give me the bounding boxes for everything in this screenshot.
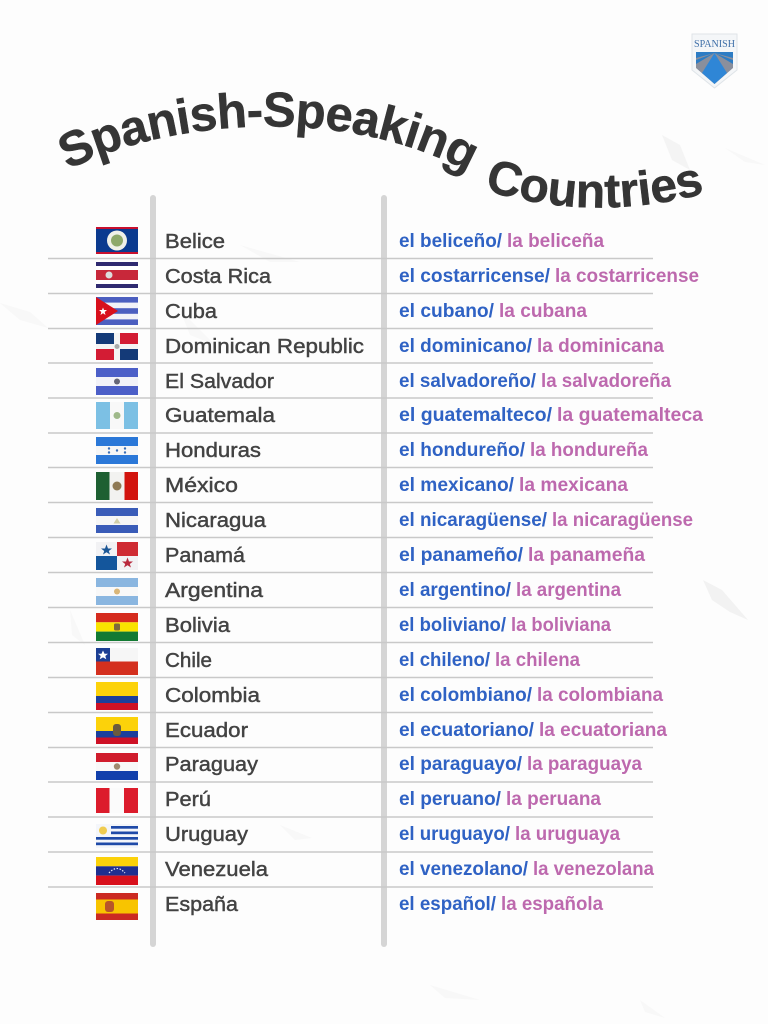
row: Chile — [96, 648, 580, 675]
feminine form: la hondureña — [530, 439, 648, 461]
feminine form: la uruguaya — [515, 823, 620, 845]
flag: Ecuador — [96, 717, 138, 744]
country name: Argentina — [165, 579, 264, 602]
row: Argentina — [96, 578, 621, 605]
masculine form: el cubano/ — [399, 300, 495, 322]
feminine form: la cubana — [499, 300, 587, 322]
flag: Panama — [96, 542, 138, 570]
country name: Perú — [165, 788, 211, 811]
feminine form: la chilena — [495, 649, 580, 671]
feminine form: la salvadoreña — [541, 370, 671, 392]
country name: Costa Rica — [165, 265, 272, 288]
country name: Belice — [165, 230, 225, 253]
flag: Honduras — [96, 437, 138, 464]
country name: Ecuador — [165, 719, 248, 742]
feminine form: la mexicana — [519, 474, 628, 496]
masculine form: el costarricense/ — [399, 265, 551, 287]
country name: Colombia — [165, 684, 261, 707]
flag: Cuba — [96, 297, 138, 325]
masculine form: el boliviano/ — [399, 614, 507, 636]
row: Cuba — [96, 297, 587, 325]
masculine form: el nicaragüense/ — [399, 509, 548, 531]
masculine form: el venezolano/ — [399, 858, 529, 880]
feminine form: la venezolana — [533, 858, 654, 880]
feminine form: la nicaragüense — [552, 509, 693, 531]
flag: Colombia — [96, 682, 138, 710]
masculine form: el guatemalteco/ — [399, 404, 553, 426]
row: Guatemala — [96, 402, 703, 429]
flag: Argentina — [96, 578, 138, 605]
flag: Dominican Republic — [96, 333, 138, 360]
country name: Bolivia — [165, 614, 231, 637]
masculine form: el colombiano/ — [399, 684, 533, 706]
masculine form: el ecuatoriano/ — [399, 719, 535, 741]
row: Nicaragua — [96, 508, 693, 533]
row: El Salvador — [96, 368, 671, 395]
row: Ecuador — [96, 717, 667, 744]
masculine form: el uruguayo/ — [399, 823, 511, 845]
feminine form: la ecuatoriana — [539, 719, 667, 741]
masculine form: el salvadoreño/ — [399, 370, 537, 392]
country name: México — [165, 474, 238, 497]
row: Colombia — [96, 682, 663, 710]
icon: academy logo shield — [692, 34, 737, 88]
row: Honduras — [96, 437, 648, 464]
icon: academy logo shield: SPANISH — [694, 39, 735, 50]
masculine form: el mexicano/ — [399, 474, 515, 496]
row: Uruguay — [96, 823, 620, 848]
row: Paraguay — [96, 753, 642, 780]
feminine form: la dominicana — [537, 335, 664, 357]
row: Bolivia — [96, 613, 611, 641]
column dividers — [150, 195, 387, 947]
country name: Dominican Republic — [165, 335, 364, 358]
masculine form: el español/ — [399, 893, 497, 915]
feminine form: la boliviana — [511, 614, 611, 636]
flag: Costa Rica — [96, 262, 138, 288]
feminine form: la peruana — [506, 788, 601, 810]
flag: Peru — [96, 788, 138, 813]
country name: El Salvador — [165, 370, 274, 393]
country name: Venezuela — [165, 858, 269, 881]
flag: Uruguay — [96, 824, 138, 848]
country name: Cuba — [165, 300, 218, 323]
title: Spanish-Speaking — [59, 92, 478, 176]
feminine form: la guatemalteca — [557, 404, 703, 426]
masculine form: el paraguayo/ — [399, 753, 523, 775]
flag: Mexico — [96, 472, 138, 500]
flag: El Salvador — [96, 368, 138, 395]
country name: Panamá — [165, 544, 246, 567]
row: Belice — [96, 227, 604, 254]
flag: Guatemala — [96, 402, 138, 429]
row: Perú — [96, 788, 601, 813]
row: Panamá — [96, 542, 645, 570]
row: Dominican Republic — [96, 333, 664, 360]
feminine form: la panameña — [528, 544, 645, 566]
row: Costa Rica — [96, 262, 699, 288]
row: España — [96, 893, 603, 920]
row: Venezuela — [96, 857, 654, 885]
country name: Paraguay — [165, 753, 259, 776]
feminine form: la costarricense — [555, 265, 699, 287]
feminine form: la argentina — [516, 579, 621, 601]
masculine form: el panameño/ — [399, 544, 524, 566]
flag: Paraguay — [96, 753, 138, 780]
masculine form: el hondureño/ — [399, 439, 526, 461]
row: México — [96, 472, 628, 500]
country name: Uruguay — [165, 823, 249, 846]
country name: Nicaragua — [165, 509, 267, 532]
country name: Chile — [165, 649, 212, 672]
feminine form: la beliceña — [507, 230, 604, 252]
title: Countries — [489, 162, 702, 208]
feminine form: la española — [501, 893, 603, 915]
feminine form: la paraguaya — [527, 753, 642, 775]
masculine form: el dominicano/ — [399, 335, 533, 357]
flag: Chile — [96, 648, 138, 675]
masculine form: el peruano/ — [399, 788, 502, 810]
flag: Nicaragua — [96, 508, 138, 533]
flag: Bolivia — [96, 613, 138, 641]
masculine form: el beliceño/ — [399, 230, 503, 252]
country name: España — [165, 893, 239, 916]
feminine form: la colombiana — [537, 684, 663, 706]
title — [59, 92, 702, 208]
masculine form: el chileno/ — [399, 649, 491, 671]
flag: Belize — [96, 227, 138, 254]
masculine form: el argentino/ — [399, 579, 512, 601]
flag: Venezuela — [96, 857, 138, 885]
country name: Guatemala — [165, 404, 276, 427]
country name: Honduras — [165, 439, 261, 462]
flag: Spain — [96, 893, 138, 920]
